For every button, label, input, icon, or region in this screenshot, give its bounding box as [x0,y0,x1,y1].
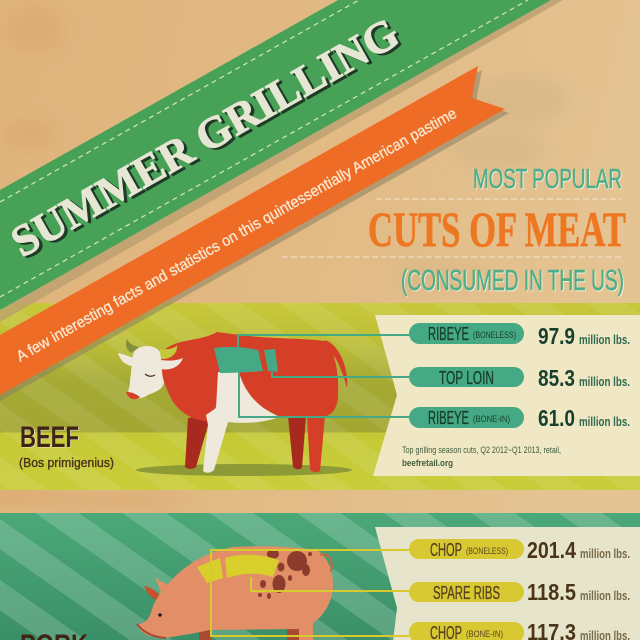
chop bone-in row [409,619,630,640]
green cuts [214,347,263,373]
beef label: (Bos primigenius) [19,455,114,470]
horns [126,339,139,353]
chop boneless row: 201.4 [527,537,576,563]
beef stats [402,323,630,469]
chop boneless row: CHOP [430,540,462,560]
green title ribbon [0,0,563,322]
white belly and leg [203,372,280,473]
pork band [0,513,640,640]
ribeye bone-in row: (BONE-IN) [473,414,510,424]
source note: Top grilling season cuts, Q2 2012~Q1 2013, retail, [402,445,561,455]
eye [145,374,155,376]
chop boneless row [409,537,630,563]
pork stats [409,537,630,640]
ribeye boneless row: (BONELESS) [473,330,516,340]
tail [320,554,332,572]
red body [160,332,338,421]
title: SUMMER GRILLING [3,8,407,267]
ribeye boneless row: RIBEYE [428,324,469,344]
connector lines [238,335,410,417]
back legs [288,416,306,469]
chop boneless row: (BONELESS) [466,546,508,556]
spots [258,549,312,599]
top loin row: 85.3 [538,365,575,391]
connector lines [211,550,409,636]
beef label: BEEF [21,422,80,455]
ribeye bone-in row: RIBEYE [428,408,469,428]
front dark leg [185,415,210,469]
heading: most popular cuts of meat [282,163,626,298]
legs [199,622,299,640]
spare ribs row: SPARE RIBS [433,583,500,603]
red ear [144,586,159,600]
illustration: cow [118,332,410,476]
top loin row: TOP LOIN [439,368,494,388]
yellow cuts [197,558,223,583]
nose [126,392,140,399]
shadow [136,464,352,476]
beef band [0,303,640,490]
pig body [137,546,333,638]
ears [118,353,134,366]
title: SUMMER GRILLING [6,10,410,268]
eye [158,613,162,617]
source note: beefretail.org [402,458,453,469]
beef label: BEEF [20,421,79,454]
beef cream panel [373,315,640,476]
top loin row [409,365,630,391]
head [128,346,164,398]
ribeye boneless row [409,323,630,349]
ribeye bone-in row: 61.0 [538,405,575,431]
tail [325,340,347,388]
source note [402,445,561,469]
illustration: pig [137,546,409,640]
subtitle text: A few interesting facts and statistics on this quintessentially American pastime [14,105,460,365]
chop bone-in row: (BONE-IN) [466,629,503,639]
ribeye boneless row: 97.9 [538,323,575,349]
spare ribs row: 118.5 [527,579,576,605]
pork cream panel [375,527,640,640]
beef label [19,421,114,470]
ribeye bone-in row [409,405,630,431]
spare ribs row [409,579,630,605]
